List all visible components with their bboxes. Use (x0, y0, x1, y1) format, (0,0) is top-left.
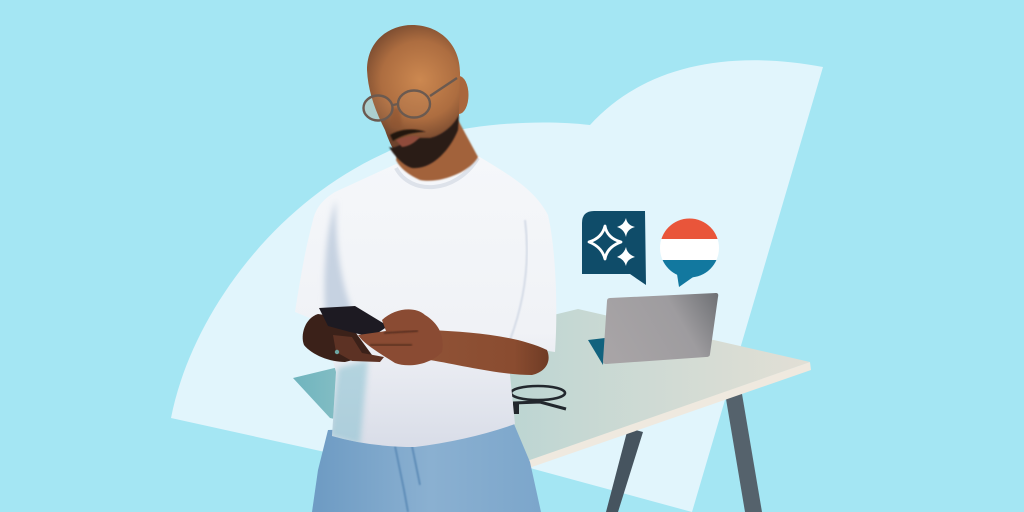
laptop base (588, 338, 605, 365)
collar (396, 158, 478, 187)
bubble tail (677, 274, 696, 287)
glasses case on desk (511, 386, 566, 414)
hand (358, 309, 443, 365)
moustache (390, 129, 426, 141)
fingers holding phone (333, 335, 384, 362)
jeans (312, 424, 541, 512)
desk leg back (606, 428, 643, 512)
right sleeve fold (510, 220, 527, 340)
pale backdrop shape (171, 60, 823, 512)
neck (396, 120, 478, 181)
ear (450, 76, 468, 114)
phone (319, 306, 388, 337)
glasses (364, 78, 457, 120)
desk edge (527, 362, 811, 468)
flag bands (660, 218, 719, 278)
illustration canvas (171, 25, 823, 512)
desk leg front (725, 388, 762, 512)
nose shade (390, 108, 402, 128)
laptop (588, 293, 718, 365)
jeans fly seam (395, 446, 420, 512)
forearm near viewer left (303, 314, 372, 362)
icon: sparkle speech bubble (582, 211, 646, 285)
icon: Dutch flag speech bubble (658, 217, 722, 287)
lower shirt blue shadow (330, 360, 368, 445)
shirt shadows (324, 158, 527, 445)
skull and face (367, 25, 460, 167)
small sparkle top (617, 218, 635, 237)
red band (662, 218, 718, 239)
large outlined sparkle (589, 226, 621, 259)
laptop lid (603, 293, 718, 364)
white band (658, 239, 722, 260)
small sparkle bottom (617, 247, 635, 266)
desk (293, 309, 811, 512)
ring (335, 350, 339, 354)
head (364, 25, 468, 168)
beard (389, 115, 459, 168)
t-shirt (295, 156, 556, 447)
person (295, 25, 556, 512)
blue band (662, 260, 716, 278)
desk top (293, 309, 810, 462)
mouth (396, 136, 420, 147)
sleeve shadow (324, 200, 352, 320)
finger creases (370, 331, 418, 345)
forearm right (430, 330, 549, 375)
